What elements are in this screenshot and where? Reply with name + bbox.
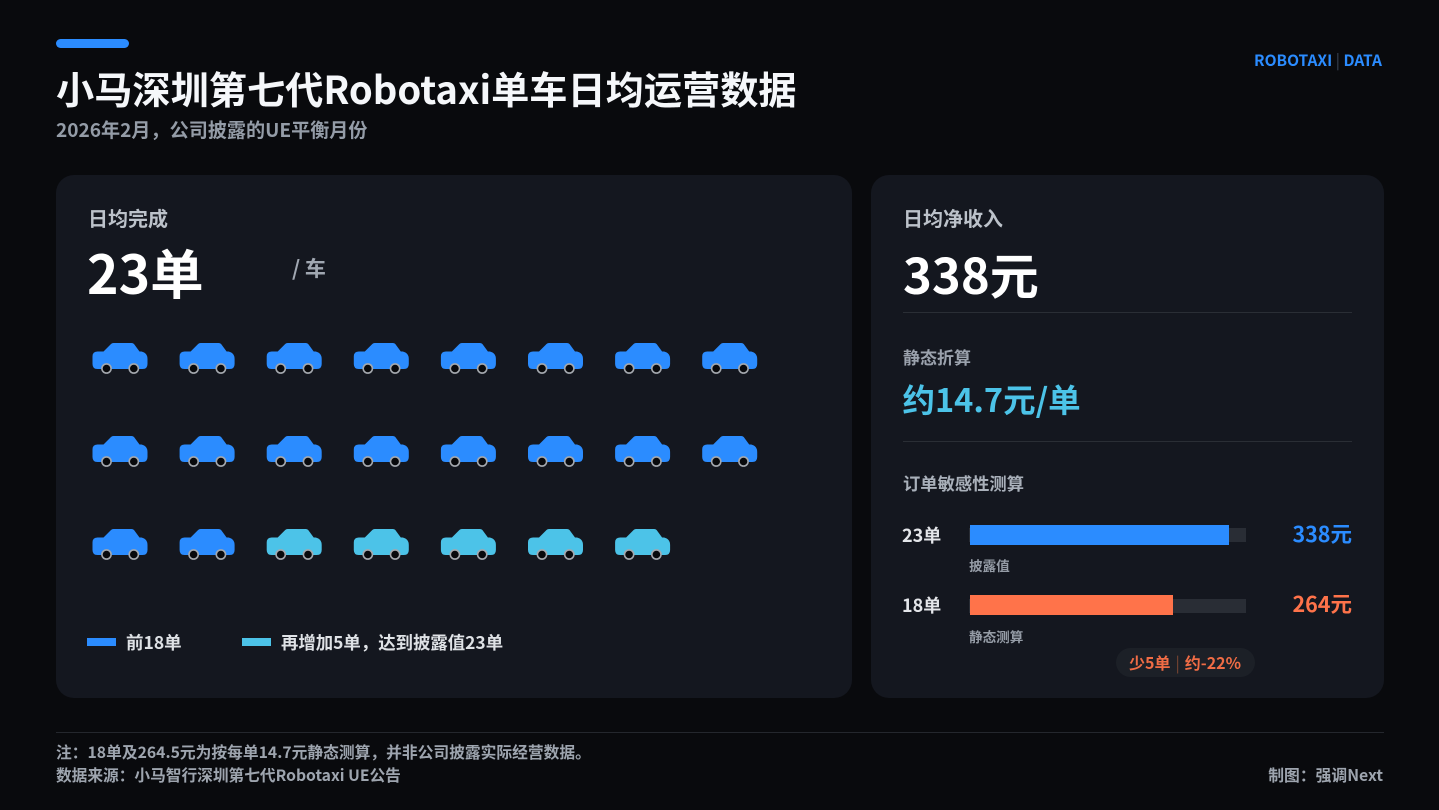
icon: car 22 [528, 529, 583, 559]
legend text: first 18: 前18单 [126, 630, 182, 655]
icon: car 10 [180, 436, 235, 466]
row: 18 orders [902, 588, 1352, 646]
icon: car 23 [615, 529, 670, 559]
row value: 18 orders: 264元 [1292, 588, 1352, 619]
icon: car 9 [92, 436, 148, 466]
callout text: 少5单 | 约-22% [1129, 650, 1241, 674]
bar track: 18 orders [969, 599, 1246, 613]
sensitivity heading: 订单敏感性测算 [903, 470, 1024, 495]
row note: static estimate: 静态测算 [969, 626, 1023, 646]
static conversion label: 静态折算 [903, 344, 971, 369]
static conversion value: 约14.7元/单 [902, 375, 1081, 422]
subtitle: 2026年2月，公司披露的UE平衡月份 [56, 115, 367, 143]
icon: car 19 [267, 529, 322, 559]
icon: car 16 [702, 436, 757, 466]
bar track: 23 orders [969, 528, 1246, 542]
panel: net income [871, 175, 1384, 698]
icon: car 12 [354, 436, 409, 466]
row note: disclosed: 披露值 [969, 555, 1010, 575]
icon: car 17 [92, 529, 148, 559]
orders label: 日均完成 [88, 203, 168, 232]
icon: car 7 [615, 343, 670, 373]
icon: car 20 [354, 529, 409, 559]
row: 23 orders [902, 518, 1352, 575]
icon: car 13 [441, 436, 496, 466]
icon: car 21 [441, 529, 496, 559]
income label: 日均净收入 [903, 203, 1003, 232]
legend swatch: first 18 [87, 638, 116, 646]
icon: car 11 [267, 436, 322, 466]
icon: car 8 [702, 343, 757, 373]
icon: car 3 [267, 343, 322, 373]
icon: car 18 [180, 529, 235, 559]
callout: difference pill [1116, 648, 1255, 677]
footnote: 注：18单及264.5元为按每单14.7元静态测算，并非公司披露实际经营数据。 [56, 740, 591, 763]
title: 小马深圳第七代Robotaxi单车日均运营数据 [56, 61, 797, 116]
icon: car 14 [528, 436, 583, 466]
row label: 18 orders: 18单 [902, 592, 941, 618]
icon: car 15 [615, 436, 670, 466]
orders unit: / 车 [292, 253, 326, 283]
accent bar [56, 38, 129, 48]
icon: car 6 [528, 343, 583, 373]
legend text: additional 5: 再增加5单，达到披露值23单 [281, 630, 503, 655]
tag: ROBOTAXI|DATA [1254, 49, 1382, 71]
row value: 23 orders: 338元 [1292, 518, 1352, 549]
icon: car 4 [354, 343, 409, 373]
income value: 338元 [903, 238, 1039, 309]
row label: 23 orders: 23单 [902, 522, 941, 548]
icon: car 1 [92, 343, 148, 373]
bar fill: 18 orders [970, 595, 1172, 615]
legend [87, 630, 503, 655]
icon: car 2 [180, 343, 235, 373]
legend swatch: additional 5 [242, 638, 271, 646]
panel: daily orders [56, 175, 852, 698]
source: 数据来源：小马智行深圳第七代Robotaxi UE公告 [56, 763, 401, 786]
bar fill: 23 orders [970, 525, 1228, 545]
credit: 制图：强调Next [1268, 763, 1383, 786]
orders value: 23单 [87, 233, 204, 310]
icon: car 5 [441, 343, 496, 373]
